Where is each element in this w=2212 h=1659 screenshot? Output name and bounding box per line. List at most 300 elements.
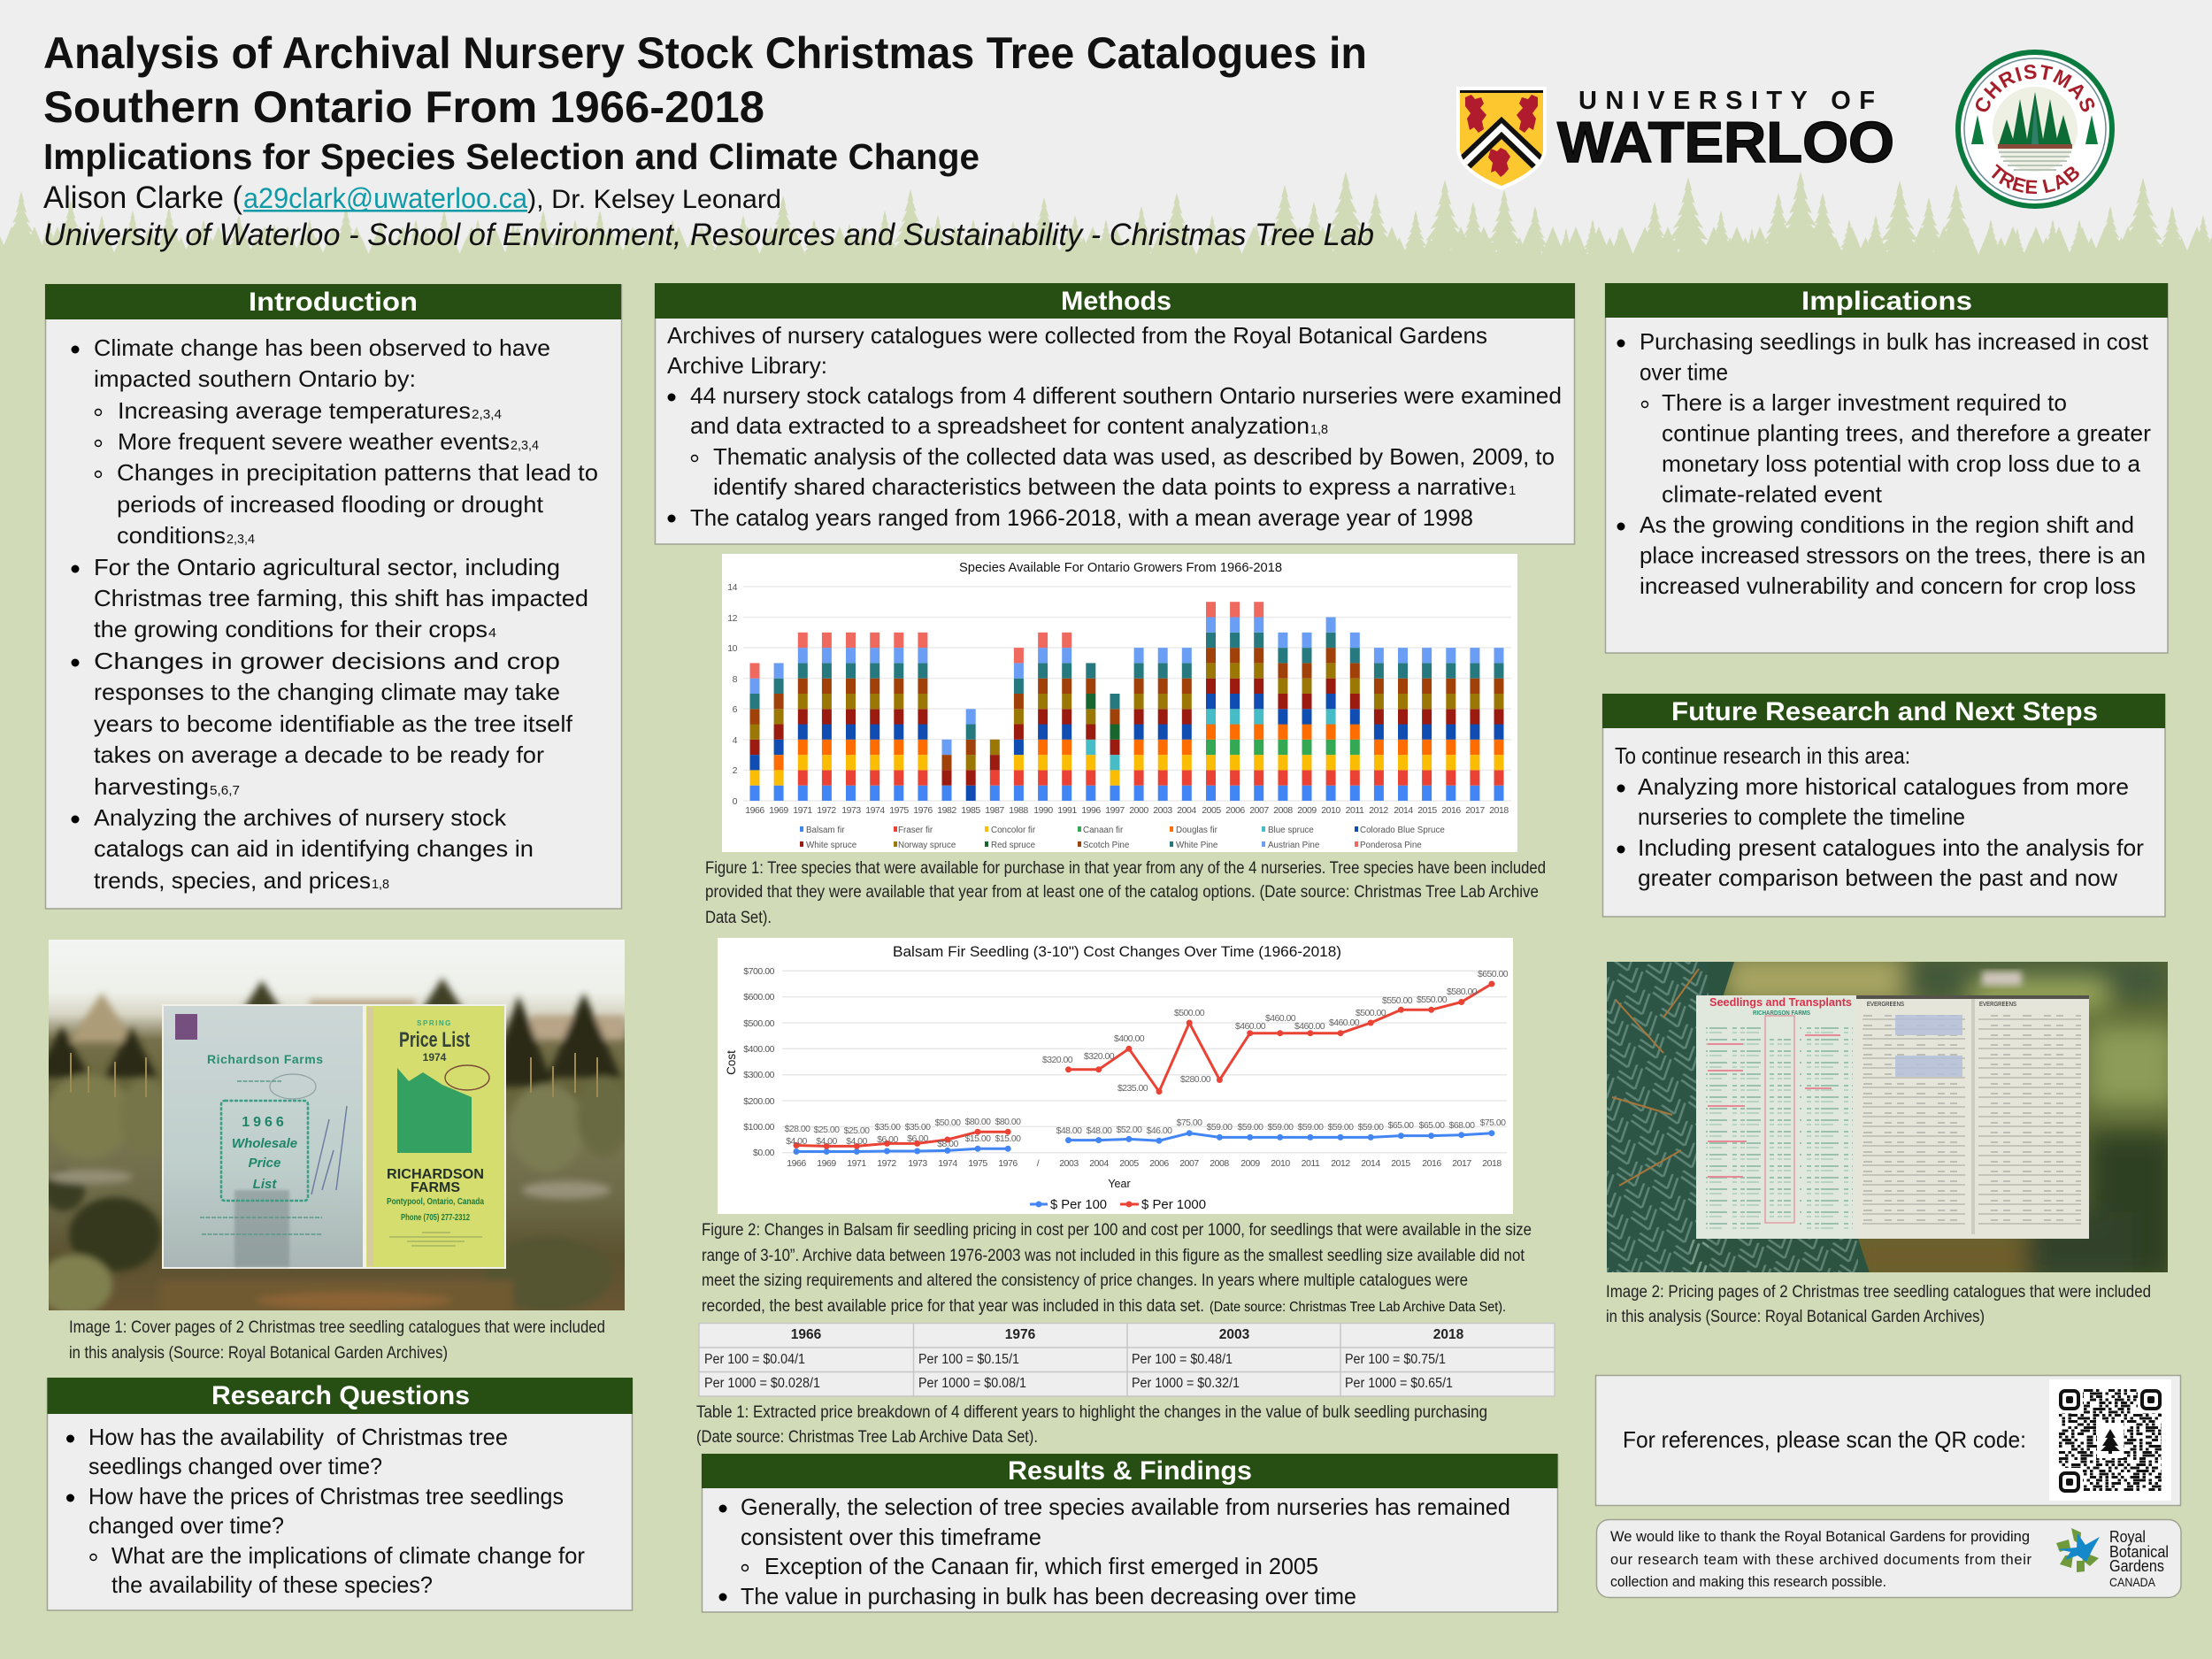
- y axis labels: 12: [727, 613, 738, 624]
- x axis year labels: 2009: [1297, 805, 1317, 816]
- data labels: $68.00: [1449, 1120, 1475, 1131]
- x axis labels: [787, 1158, 1502, 1169]
- implications list: over time: [1640, 359, 1728, 386]
- catalogue cover 1974: FARMS: [411, 1180, 460, 1195]
- data labels: $59.00: [1238, 1122, 1263, 1133]
- data labels: $80.00: [965, 1117, 991, 1127]
- legend: White Pine: [1176, 841, 1218, 850]
- data labels: $6.00: [877, 1134, 898, 1145]
- x axis labels: 1973: [908, 1158, 927, 1169]
- caption: Table 1: [696, 1403, 1487, 1447]
- x axis year labels: 1976: [913, 805, 933, 816]
- acknowledgement text: We would like to thank the Royal Botanical Gardens for providing: [1610, 1529, 2030, 1545]
- heading: Introduction: Introduction: [249, 288, 418, 317]
- x axis year labels: 1987: [985, 805, 1004, 816]
- chart title: Balsam Fir Seedling (3-10") Cost Changes Over Time (1966-2018): [893, 943, 1341, 960]
- implications list: [1617, 328, 2151, 599]
- y axis title: Cost: [725, 1050, 738, 1075]
- intro bullet list: 2,3,4: [472, 407, 502, 422]
- x axis labels: 2009: [1240, 1158, 1260, 1169]
- caption: Image 2: [1606, 1283, 2151, 1326]
- x axis year labels: 1990: [1033, 805, 1053, 816]
- panel: Research Questions: [48, 1378, 633, 1610]
- catalogue cover 1966: List: [253, 1177, 277, 1192]
- catalogue cover 1966: 1966: [242, 1115, 288, 1130]
- future research list: To continue research in this area:: [1615, 742, 1910, 769]
- table: price breakdown: 1976: [1005, 1327, 1036, 1342]
- caption: Image 1: Image 1: Cover pages of 2 Christmas tree seedling catalogues that were included: [69, 1318, 605, 1337]
- data labels: $59.00: [1358, 1122, 1384, 1133]
- legend: Norway spruce: [898, 841, 956, 850]
- data labels: $460.00: [1294, 1021, 1325, 1032]
- heading: Methods: Methods: [1061, 287, 1171, 316]
- x axis year labels: 1969: [769, 805, 788, 816]
- caption: Image 2: Image 2: Pricing pages of 2 Christmas tree seedling catalogues that were included: [1606, 1283, 2151, 1302]
- table: price breakdown: [699, 1323, 1555, 1396]
- data labels: $25.00: [814, 1125, 840, 1135]
- intro bullet list: 2,3,4: [511, 438, 539, 453]
- x axis year labels: 1985: [961, 805, 980, 816]
- y axis labels: $600.00: [743, 992, 775, 1002]
- x axis labels: 1971: [847, 1158, 866, 1169]
- x axis labels: 2016: [1422, 1158, 1441, 1169]
- research questions list: What are the implications of climate change for: [111, 1542, 585, 1569]
- x axis title: Year: [1108, 1178, 1131, 1190]
- intro bullet list: Increasing average temperatures: [118, 397, 471, 424]
- data labels: $6.00: [907, 1133, 928, 1144]
- y axis labels: 2: [733, 765, 738, 776]
- catalogue cover 1974: RICHARDSON: [387, 1167, 484, 1182]
- x axis year labels: 2000: [1129, 805, 1148, 816]
- title: Analysis of Archival Nursery Stock Christmas Tree Catalogues in: [43, 28, 1367, 78]
- catalogue cover 1974: Phone (705) 277-2312: [401, 1212, 470, 1223]
- heading: Results & Findings: Results & Findings: [1008, 1456, 1252, 1486]
- future research list: [1615, 742, 2144, 891]
- authors: [43, 180, 781, 215]
- table: price breakdown: Per 100 = $0.15/1: [918, 1352, 1019, 1367]
- results list: Generally, the selection of tree species available from nurseries has remained: [741, 1494, 1510, 1520]
- y axis labels: $700.00: [743, 966, 775, 977]
- x axis labels: 2011: [1302, 1158, 1320, 1169]
- legend: Ponderosa Pine: [1360, 841, 1422, 850]
- authors: Alison Clarke (: [43, 180, 242, 215]
- intro bullet list: catalogs can aid in identifying changes in: [94, 835, 534, 862]
- x axis labels: 2018: [1482, 1158, 1502, 1169]
- data labels: $75.00: [1177, 1118, 1202, 1128]
- x axis labels: 2004: [1089, 1158, 1109, 1169]
- catalogue cover 1974: Price List: [399, 1028, 470, 1052]
- results list: consistent over this timeframe: [741, 1524, 1041, 1550]
- acknowledgement text: our research team with these archived documents from their: [1610, 1552, 2032, 1568]
- x axis year labels: 2006: [1225, 805, 1245, 816]
- logo: University of Waterloo: UNIVERSITY OF: [1578, 87, 1875, 115]
- data labels: $4.00: [816, 1136, 837, 1147]
- heading: Implications: Implications: [1801, 287, 1972, 316]
- x axis year labels: 1974: [865, 805, 885, 816]
- x axis year labels: 2011: [1346, 805, 1364, 816]
- catalogue cover 1974: [365, 1005, 505, 1268]
- heading: Implications: [1605, 283, 2168, 318]
- y axis labels: 14: [727, 582, 738, 593]
- catalogue cover 1966: Wholesale: [232, 1136, 297, 1151]
- legend: Austrian Pine: [1268, 841, 1320, 850]
- intro bullet list: 1,8: [372, 877, 389, 892]
- data labels: $59.00: [1268, 1122, 1294, 1133]
- results list: [718, 1494, 1510, 1609]
- methods text: identify shared characteristics between the data points to express a narrative: [713, 473, 1508, 500]
- data labels: $52.00: [1117, 1125, 1142, 1135]
- y axis labels: $300.00: [743, 1070, 775, 1080]
- intro bullet list: impacted southern Ontario by:: [94, 365, 416, 392]
- x axis year labels: 2014: [1394, 805, 1413, 816]
- intro bullet list: 4: [488, 626, 496, 641]
- data labels: $48.00: [1056, 1125, 1082, 1136]
- results list: The value in purchasing in bulk has been decreasing over time: [741, 1583, 1356, 1609]
- legend: Blue spruce: [1268, 826, 1314, 835]
- results list: Exception of the Canaan fir, which first emerged in 2005: [764, 1553, 1318, 1579]
- implications list: As the growing conditions in the region shift and: [1640, 511, 2134, 538]
- y axis labels: 6: [733, 704, 738, 715]
- y axis labels: $400.00: [743, 1044, 775, 1055]
- logo: Christmas Tree Lab: CHRISTMAS: [1976, 65, 2095, 111]
- logo: University of Waterloo: WATERLOO: [1557, 110, 1894, 174]
- future research list: greater comparison between the past and now: [1638, 864, 2117, 891]
- data labels: $8.00: [937, 1139, 958, 1149]
- intro bullet list: [71, 334, 598, 894]
- data labels: $550.00: [1382, 995, 1413, 1006]
- legend: Balsam fir: [806, 826, 845, 835]
- x axis labels: 1969: [817, 1158, 836, 1169]
- y axis labels: 0: [733, 796, 738, 807]
- table: price breakdown: Per 1000 = $0.08/1: [918, 1376, 1026, 1391]
- legend: [800, 826, 1445, 850]
- x axis year labels: 2007: [1249, 805, 1269, 816]
- QR code: [2049, 1379, 2171, 1501]
- x axis labels: 2012: [1331, 1158, 1350, 1169]
- authors: a29clark@uwaterloo.ca: [243, 182, 527, 214]
- data labels: $320.00: [1042, 1055, 1073, 1065]
- catalogue cover 1974: 1974: [423, 1051, 447, 1064]
- x axis labels: 1975: [968, 1158, 987, 1169]
- methods text: Archive Library:: [667, 352, 827, 379]
- data labels: $25.00: [844, 1125, 870, 1136]
- chart: balsam fir seedling cost line chart: [718, 938, 1513, 1214]
- x axis labels: 2007: [1179, 1158, 1199, 1169]
- panel: Results & Findings: [702, 1454, 1557, 1612]
- acknowledgement text: collection and making this research possible.: [1610, 1574, 1886, 1590]
- y axis labels: $0.00: [753, 1148, 775, 1158]
- stacked bars: [755, 602, 1499, 801]
- x axis year labels: 2018: [1489, 805, 1509, 816]
- x axis labels: 2017: [1452, 1158, 1471, 1169]
- table: price breakdown: Per 100 = $0.48/1: [1132, 1352, 1233, 1367]
- affiliation: University of Waterloo - School of Environment, Resources and Sustainability - Christmas Tree Lab: [43, 218, 1374, 252]
- methods text: [667, 322, 1562, 531]
- logo: Royal Botanical Gardens: Gardens: [2109, 1557, 2164, 1575]
- x axis labels: 1974: [938, 1158, 957, 1169]
- legend: [1030, 1198, 1206, 1212]
- x axis year labels: 1982: [937, 805, 956, 816]
- data labels: $35.00: [905, 1122, 931, 1133]
- y axis labels: 4: [733, 735, 738, 746]
- intro bullet list: More frequent severe weather events: [118, 428, 510, 455]
- data labels: $28.00: [785, 1124, 810, 1134]
- panel: Implications: [1605, 283, 2168, 653]
- panel: Methods: [655, 283, 1575, 544]
- chart: species availability stacked bars: [722, 554, 1517, 852]
- table: price breakdown: Per 1000 = $0.32/1: [1132, 1376, 1240, 1391]
- x axis year labels: 2008: [1273, 805, 1293, 816]
- legend: Douglas fir: [1176, 826, 1218, 835]
- x axis labels: 2008: [1210, 1158, 1229, 1169]
- methods text: Thematic analysis of the collected data was used, as described by Bowen, 2009, to: [713, 443, 1555, 470]
- x axis year labels: 2003: [1153, 805, 1172, 816]
- references text: For references, please scan the QR code:: [1623, 1426, 2026, 1453]
- catalogue page: Seedlings and Transplants: Seedlings and Transplants: [1709, 995, 1852, 1009]
- heading: Results & Findings: [702, 1454, 1557, 1488]
- methods text: 1: [1509, 483, 1516, 498]
- x axis year labels: 1973: [841, 805, 861, 816]
- legend: $ Per 100: [1050, 1198, 1107, 1212]
- data labels: $235.00: [1118, 1083, 1148, 1094]
- data labels: $400.00: [1114, 1033, 1145, 1044]
- data labels: $460.00: [1265, 1013, 1296, 1024]
- heading: Future Research and Next Steps: [1602, 694, 2165, 728]
- data labels: $59.00: [1298, 1122, 1324, 1133]
- caption: Table 1: (Date source: Christmas Tree Lab Archive Data Set).: [696, 1428, 1038, 1447]
- y axis labels: 8: [733, 674, 738, 685]
- caption: Table 1: Table 1: Extracted price breakdown of 4 different years to highlight the changes in the value of bulk seedling purchasing: [696, 1403, 1487, 1422]
- data labels: $59.00: [1207, 1122, 1233, 1133]
- caption: Figure 2: Figure 2: Changes in Balsam fir seedling pricing in cost per 100 and cost per 1000, for seedlings that were available in the size: [702, 1221, 1532, 1240]
- x axis year labels: [745, 805, 1509, 816]
- intro bullet list: Analyzing the archives of nursery stock: [94, 804, 507, 831]
- intro bullet list: Changes in precipitation patterns that lead to: [117, 459, 598, 486]
- research questions list: How have the prices of Christmas tree seedlings: [88, 1483, 564, 1509]
- methods text: and data extracted to a spreadsheet for content analyzation: [690, 412, 1310, 439]
- x axis year labels: 1997: [1105, 805, 1125, 816]
- catalogue cover 1966: Price: [249, 1156, 280, 1171]
- x axis labels: 2006: [1149, 1158, 1169, 1169]
- x axis year labels: 2004: [1177, 805, 1196, 816]
- caption: Figure 1: [705, 859, 1546, 927]
- x axis year labels: 1991: [1057, 805, 1077, 816]
- heading: Research Questions: [48, 1378, 633, 1414]
- data labels: $460.00: [1235, 1021, 1266, 1032]
- data labels: $80.00: [995, 1117, 1021, 1127]
- panel: acknowledgement: [1596, 1520, 2181, 1598]
- y axis labels: [743, 966, 775, 1158]
- table: price breakdown: 2003: [1219, 1327, 1250, 1342]
- intro bullet list: 5,6,7: [210, 783, 240, 798]
- table: price breakdown: Per 1000 = $0.028/1: [704, 1376, 820, 1391]
- x axis year labels: 2017: [1465, 805, 1485, 816]
- logo: Royal Botanical Gardens: [2056, 1528, 2169, 1589]
- intro bullet list: years to become identifiable as the tree itself: [94, 710, 573, 737]
- methods text: Archives of nursery catalogues were collected from the Royal Botanical Gardens: [667, 322, 1487, 349]
- caption: Image 2: in this analysis (Source: Royal Botanical Garden Archives): [1606, 1308, 1985, 1326]
- data labels: $65.00: [1419, 1120, 1445, 1131]
- methods text: 1,8: [1310, 422, 1328, 437]
- y axis labels: 10: [727, 643, 738, 654]
- x axis year labels: 2015: [1417, 805, 1437, 816]
- table: price breakdown: Per 100 = $0.04/1: [704, 1352, 805, 1367]
- heading: Methods: [655, 283, 1575, 319]
- data labels: $4.00: [786, 1136, 807, 1147]
- x axis year labels: 1996: [1081, 805, 1101, 816]
- data labels: $59.00: [1328, 1122, 1354, 1133]
- legend: Fraser fir: [898, 826, 933, 835]
- catalogue page: Evergreens price tables: EVERGREENS: [1979, 1000, 2016, 1008]
- future research list: Including present catalogues into the analysis for: [1638, 834, 2144, 861]
- intro bullet list: takes on average a decade to be ready for: [94, 741, 544, 768]
- legend: Red spruce: [991, 841, 1036, 850]
- caption: Image 1: in this analysis (Source: Royal Botanical Garden Archives): [69, 1344, 448, 1363]
- legend: $ Per 1000: [1141, 1198, 1206, 1212]
- data labels: $500.00: [1174, 1008, 1205, 1018]
- chart title: Species Available For Ontario Growers From 1966-2018: [959, 561, 1282, 575]
- x axis labels: 1972: [877, 1158, 896, 1169]
- implications list: increased vulnerability and concern for crop loss: [1640, 572, 2136, 599]
- catalogue cover 1974: Pontypool, Ontario, Canada: [387, 1196, 484, 1207]
- panel: Future Research and Next Steps: [1602, 694, 2165, 917]
- intro bullet list: conditions: [117, 522, 226, 549]
- logo: Christmas Tree Lab: [1955, 50, 2115, 209]
- catalogue page: Seedlings and Transplants: RICHARDSON FARMS: [1753, 1010, 1810, 1017]
- methods text: 44 nursery stock catalogs from 4 different southern Ontario nurseries were examined: [690, 382, 1562, 409]
- legend: Canaan fir: [1083, 826, 1124, 835]
- implications list: Purchasing seedlings in bulk has increased in cost: [1640, 328, 2149, 355]
- y axis labels: [727, 582, 738, 807]
- legend: Colorado Blue Spruce: [1360, 826, 1445, 835]
- catalogue page: Evergreens price tables: EVERGREENS: [1867, 1000, 1904, 1008]
- logo: Christmas Tree Lab: TREE LAB: [1991, 164, 2079, 195]
- intro bullet list: harvesting: [94, 773, 209, 800]
- x axis labels: 2003: [1059, 1158, 1079, 1169]
- series: per 100: [796, 1133, 1492, 1152]
- data labels: $580.00: [1447, 987, 1478, 997]
- intro bullet list: responses to the changing climate may take: [94, 679, 560, 705]
- caption: Figure 1: provided that they were available that year from at least one of the catalog options. (Date source: Christmas Tree Lab Archive: [705, 883, 1539, 902]
- y axis labels: $500.00: [743, 1018, 775, 1029]
- future research list: Analyzing more historical catalogues from more: [1638, 773, 2129, 800]
- catalogue page: Evergreens price tables: [1856, 995, 2089, 1239]
- logo: Royal Botanical Gardens: Royal: [2109, 1528, 2146, 1546]
- table: price breakdown: 2018: [1433, 1327, 1464, 1342]
- caption: Figure 1: Figure 1: Tree species that were available for purchase in that year from any of the 4 nurseries. Tree species have been included: [705, 859, 1546, 878]
- future research list: nurseries to complete the timeline: [1638, 803, 1965, 830]
- methods text: The catalog years ranged from 1966-2018, with a mean average year of 1998: [690, 504, 1473, 531]
- photo: Image 2 pricing pages over fir branch: [1601, 956, 2177, 1283]
- caption: Figure 2: range of 3-10”. Archive data between 1976-2003 was not included in this figure as the smallest seedling size available did not: [702, 1247, 1525, 1265]
- caption: Figure 2: meet the sizing requirements and altered the consistency of price changes. In years where multiple catalogues were: [702, 1271, 1468, 1290]
- intro bullet list: the growing conditions for their crops: [94, 616, 488, 642]
- x axis year labels: 2010: [1321, 805, 1340, 816]
- x axis labels: 2005: [1119, 1158, 1139, 1169]
- photo: Image 1 catalogue covers over tree farm: [34, 940, 630, 1316]
- intro bullet list: Christmas tree farming, this shift has impacted: [94, 585, 588, 611]
- heading: Research Questions: Research Questions: [211, 1381, 470, 1410]
- caption: Figure 2: (Date source: Christmas Tree Lab Archive Data Set).: [1210, 1300, 1506, 1315]
- data labels: $650.00: [1478, 969, 1509, 979]
- data labels: $4.00: [846, 1136, 867, 1147]
- research questions list: seedlings changed over time?: [88, 1453, 382, 1479]
- implications list: monetary loss potential with crop loss due to a: [1662, 450, 2141, 477]
- implications list: There is a larger investment required to: [1662, 389, 2067, 416]
- logo: University of Waterloo: [1451, 87, 1894, 190]
- legend: White spruce: [806, 841, 857, 850]
- caption: Figure 2: recorded, the best available price for that year was included in this data set.: [702, 1297, 1204, 1316]
- data labels: $320.00: [1084, 1051, 1115, 1062]
- x axis year labels: 2012: [1369, 805, 1388, 816]
- catalogue cover 1966: Richardson Farms: [207, 1052, 323, 1066]
- legend: Scotch Pine: [1083, 841, 1130, 850]
- caption: Figure 1: Data Set).: [705, 909, 772, 927]
- table: price breakdown: Per 1000 = $0.65/1: [1345, 1376, 1453, 1391]
- table: price breakdown: 1966: [791, 1327, 822, 1342]
- table: price breakdown: Per 100 = $0.75/1: [1345, 1352, 1446, 1367]
- data labels: $550.00: [1417, 995, 1448, 1005]
- y axis labels: $100.00: [743, 1122, 775, 1133]
- x axis labels: 1966: [787, 1158, 806, 1169]
- logo: Royal Botanical Gardens: CANADA: [2109, 1575, 2156, 1589]
- authors: ), Dr. Kelsey Leonard: [527, 185, 781, 214]
- x axis year labels: 1975: [889, 805, 909, 816]
- x axis year labels: 2005: [1202, 805, 1221, 816]
- intro bullet list: trends, species, and prices: [94, 867, 371, 894]
- intro bullet list: Changes in grower decisions and crop: [94, 648, 560, 674]
- heading: Introduction: [45, 284, 621, 319]
- x axis labels: 2015: [1391, 1158, 1410, 1169]
- data labels: $35.00: [875, 1122, 901, 1133]
- x axis labels: /: [1037, 1158, 1040, 1169]
- intro bullet list: periods of increased flooding or drought: [117, 491, 544, 518]
- x axis year labels: 1972: [817, 805, 836, 816]
- data labels: $460.00: [1329, 1018, 1360, 1028]
- legend: Concolor fir: [991, 826, 1036, 835]
- data labels: $500.00: [1356, 1008, 1386, 1018]
- x axis labels: 2014: [1361, 1158, 1380, 1169]
- title: [43, 28, 1367, 132]
- panel: Introduction: [45, 284, 621, 909]
- data labels: $75.00: [1480, 1118, 1506, 1128]
- x axis year labels: 2016: [1441, 805, 1461, 816]
- subtitle: Implications for Species Selection and Climate Change: [43, 136, 979, 177]
- data labels: $15.00: [995, 1133, 1021, 1144]
- x axis labels: 1976: [998, 1158, 1018, 1169]
- intro bullet list: For the Ontario agricultural sector, including: [94, 554, 560, 580]
- acknowledgement text: [1610, 1529, 2032, 1590]
- research questions list: How has the availability of Christmas tree: [88, 1424, 508, 1450]
- panel: references: [1596, 1375, 2180, 1506]
- header band with tree line: [0, 0, 2212, 255]
- catalogue cover 1974: SPRING: [417, 1019, 452, 1027]
- catalogue cover 1966: [163, 1005, 364, 1268]
- heading: Future Research and Next Steps: Future Research and Next Steps: [1671, 697, 2098, 726]
- caption: Image 1: [69, 1318, 605, 1363]
- y axis labels: $200.00: [743, 1096, 775, 1107]
- data labels: [785, 969, 1509, 1149]
- logo: Royal Botanical Gardens: Botanical: [2109, 1543, 2169, 1561]
- implications list: climate-related event: [1662, 481, 1883, 508]
- intro bullet list: Climate change has been observed to have: [94, 334, 550, 361]
- data labels: $280.00: [1180, 1074, 1211, 1085]
- research questions list: the availability of these species?: [111, 1571, 433, 1598]
- data labels: $48.00: [1087, 1125, 1112, 1136]
- data labels: $65.00: [1388, 1120, 1414, 1131]
- implications list: place increased stressors on the trees, there is an: [1640, 541, 2146, 568]
- x axis labels: 2010: [1271, 1158, 1290, 1169]
